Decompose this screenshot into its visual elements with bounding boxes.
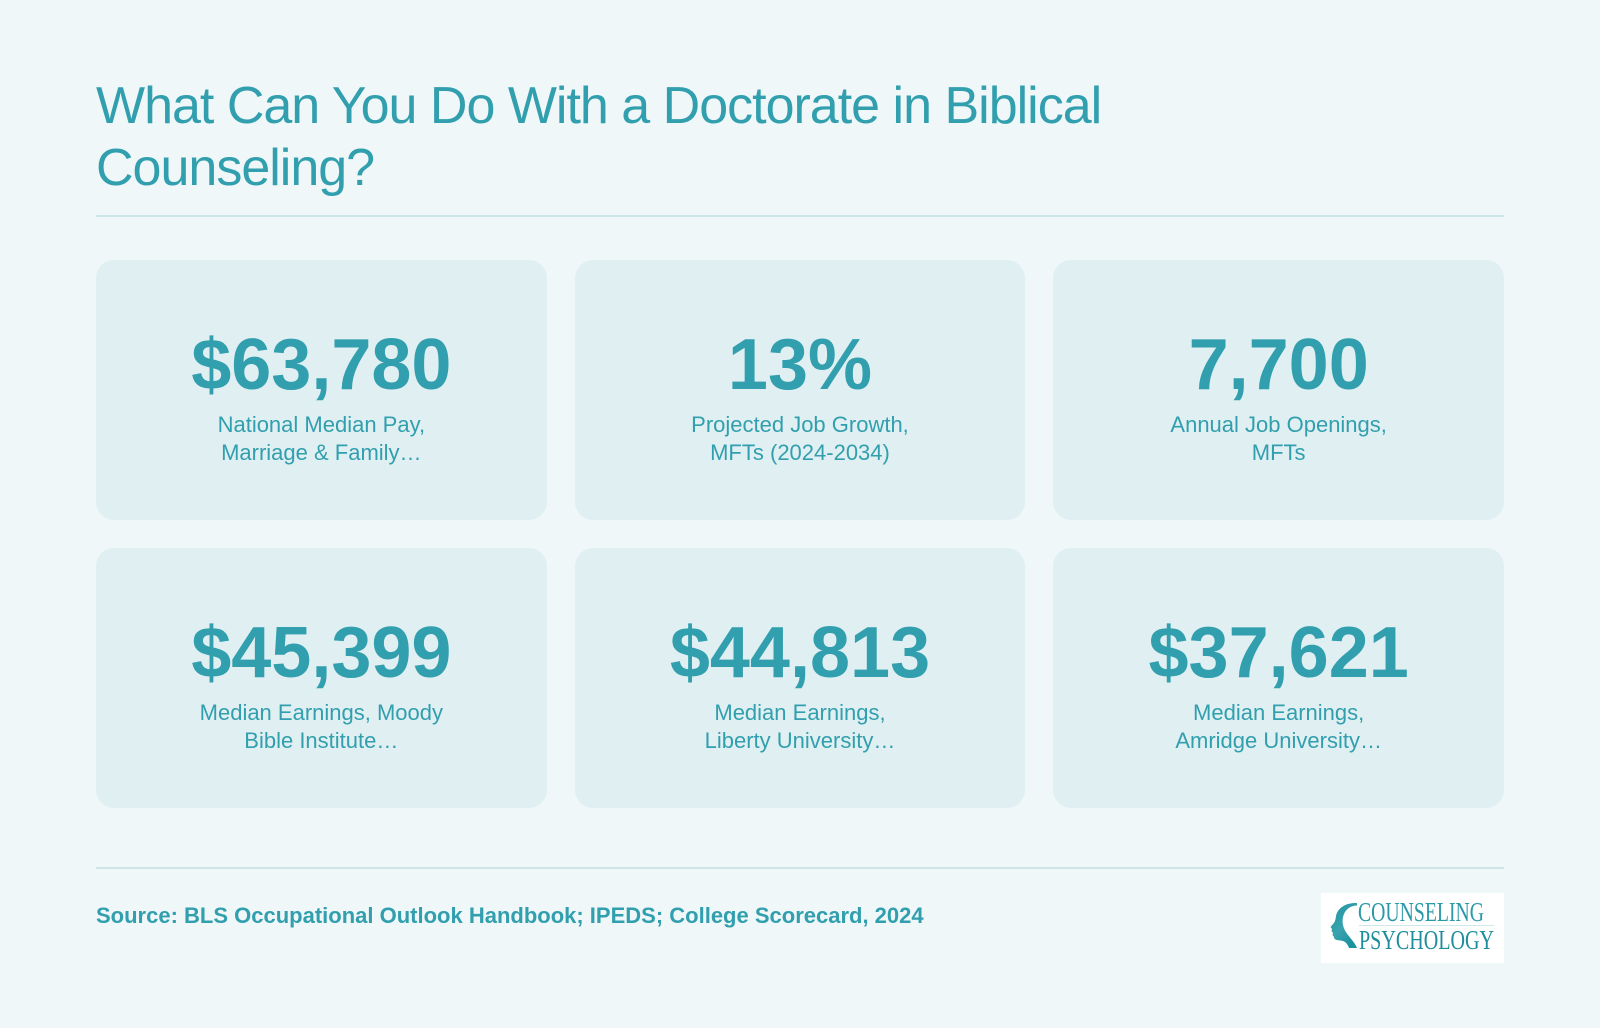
icon: head profile [1330,903,1357,948]
stat value: $63,780 [191,325,451,405]
panel: Liberty University earnings [575,548,1025,808]
logo: Counseling Psychology [1321,893,1504,963]
stat label: Annual Job Openings, [1170,412,1387,437]
stat label [705,700,895,753]
stat label: MFTs [1252,440,1306,465]
stat value: 13% [728,325,872,405]
stat label [218,412,425,465]
stat value: $44,813 [670,613,930,693]
stat label: MFTs (2024-2034) [710,440,890,465]
title: Counseling? [96,139,374,197]
stat label [1170,412,1387,465]
panel: annual job openings [1053,260,1504,520]
stat label: Liberty University… [705,728,895,753]
stat label: Projected Job Growth, [691,412,909,437]
stat label: Median Earnings, [1193,700,1364,725]
panel: Amridge University earnings [1053,548,1504,808]
stat value: $45,399 [191,613,451,693]
stat label: National Median Pay, [218,412,425,437]
panel: projected job growth [575,260,1025,520]
title [96,77,1101,197]
stat label: Marriage & Family… [221,440,422,465]
panel: national median pay [96,260,547,520]
stat value: $37,621 [1149,613,1409,693]
stat label: Bible Institute… [244,728,398,753]
stat label [691,412,909,465]
stat label [1175,700,1382,753]
title: What Can You Do With a Doctorate in Biblical [96,77,1101,135]
stat label: Median Earnings, [714,700,886,725]
stat label: Median Earnings, Moody [200,700,443,725]
panel: Moody Bible Institute earnings [96,548,547,808]
stat label [200,700,443,753]
stat label: Amridge University… [1175,728,1382,753]
source note: Source: BLS Occupational Outlook Handbook; IPEDS; College Scorecard, 2024 [96,903,924,928]
stat value: 7,700 [1189,325,1369,405]
